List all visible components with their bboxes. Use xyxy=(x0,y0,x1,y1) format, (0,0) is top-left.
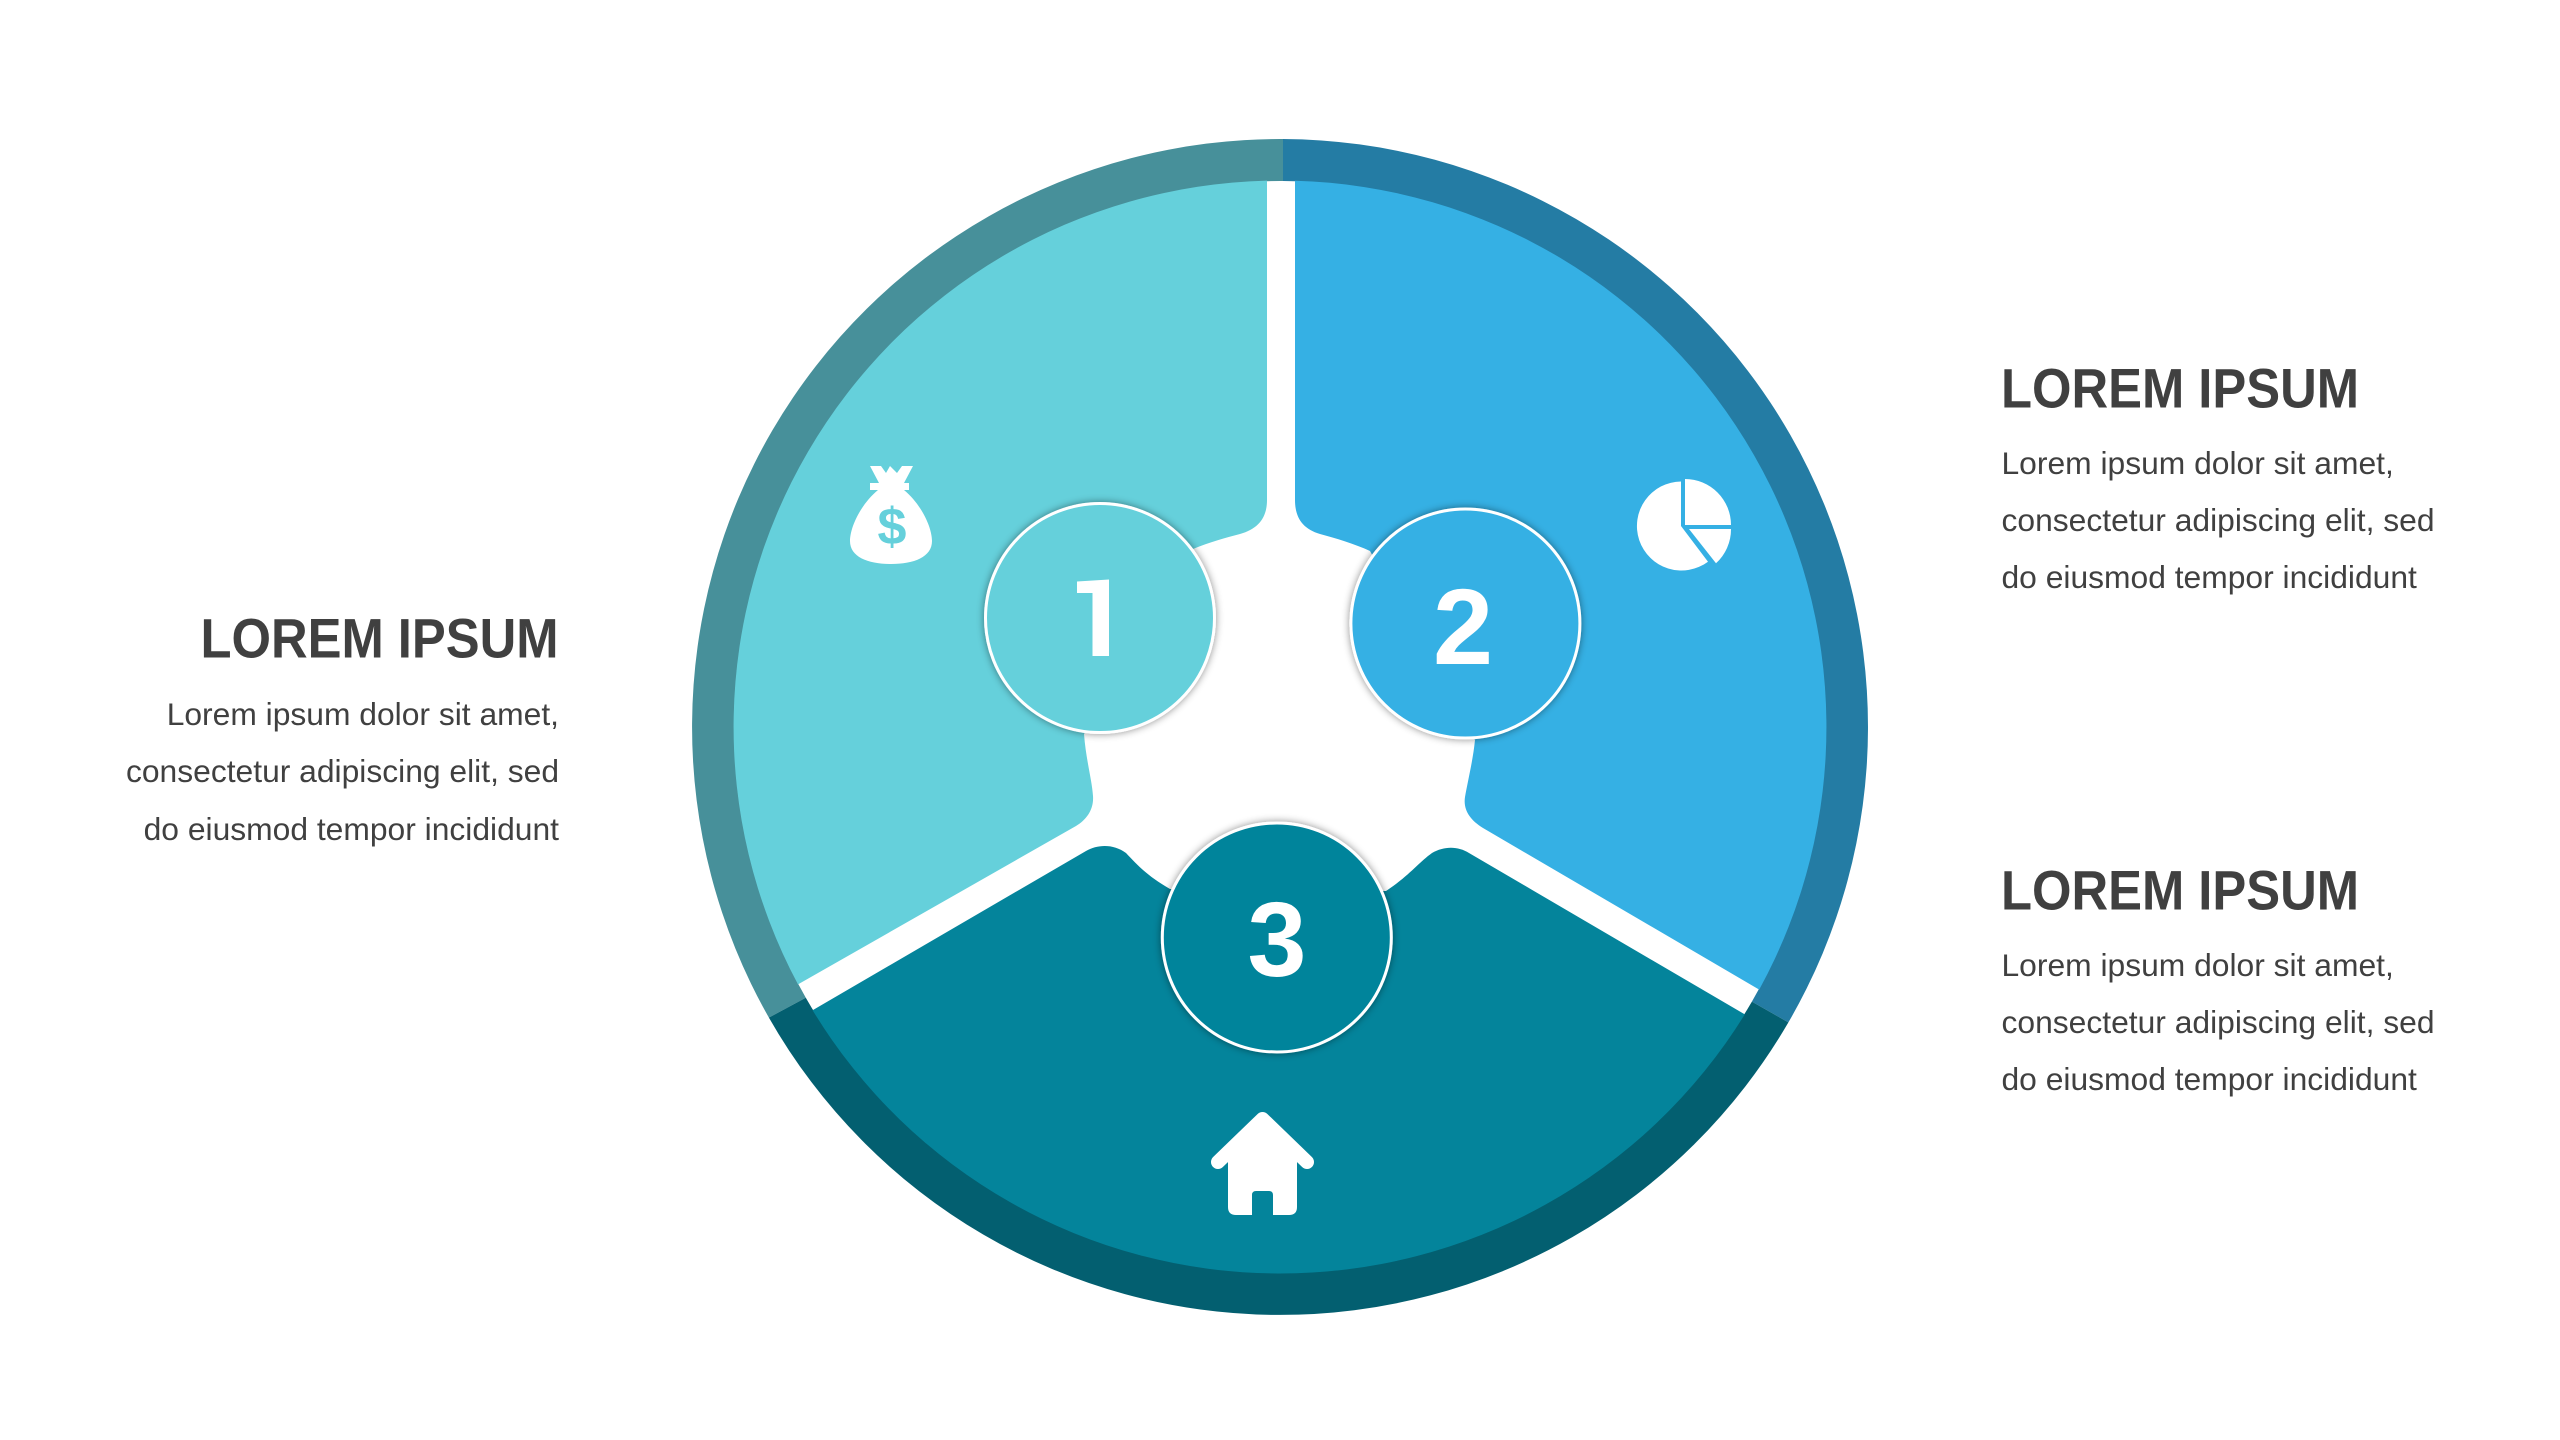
icon: pie chart xyxy=(1637,479,1731,570)
number badge 3: 3 xyxy=(1248,881,1306,999)
number badge 3 xyxy=(1162,823,1391,1052)
body: do eiusmod tempor incididunt xyxy=(2002,1061,2417,1097)
heading: LOREM IPSUM xyxy=(200,606,558,670)
text block: left xyxy=(126,606,559,847)
icon: money bag xyxy=(850,466,932,564)
heading: LOREM IPSUM xyxy=(2001,858,2359,922)
ring arc: dark teal xyxy=(769,998,1788,1315)
body: Lorem ipsum dolor sit amet, xyxy=(2002,445,2394,481)
number badge 2 xyxy=(1351,509,1580,738)
body: consectetur adipiscing elit, sed xyxy=(2002,1004,2435,1040)
text block: bottom right xyxy=(2001,858,2435,1097)
outer ring xyxy=(692,139,1868,1315)
icon: house xyxy=(1218,1119,1307,1215)
ring arc: blue xyxy=(1283,139,1868,1022)
body: do eiusmod tempor incididunt xyxy=(2002,559,2417,595)
body: do eiusmod tempor incididunt xyxy=(144,811,559,847)
body xyxy=(2002,947,2435,1097)
number badge 1 xyxy=(986,504,1214,732)
text block: top right xyxy=(2001,356,2435,595)
segment 3: dark teal xyxy=(813,846,1745,1273)
body: Lorem ipsum dolor sit amet, xyxy=(167,696,559,732)
number badge 2: 2 xyxy=(1433,566,1493,687)
body: Lorem ipsum dolor sit amet, xyxy=(2002,947,2394,983)
body: consectetur adipiscing elit, sed xyxy=(126,753,559,789)
number badge 1: 1 xyxy=(1069,558,1129,679)
segment 2: blue xyxy=(1295,181,1826,990)
circular diagram and text xyxy=(127,139,2432,1315)
segment 1: light teal xyxy=(734,181,1267,984)
body xyxy=(2002,445,2435,595)
ring arc: teal xyxy=(692,139,1283,1018)
heading: LOREM IPSUM xyxy=(2001,356,2359,420)
body: consectetur adipiscing elit, sed xyxy=(2002,502,2435,538)
body xyxy=(126,696,559,847)
icon: money bag: $ xyxy=(878,498,907,556)
